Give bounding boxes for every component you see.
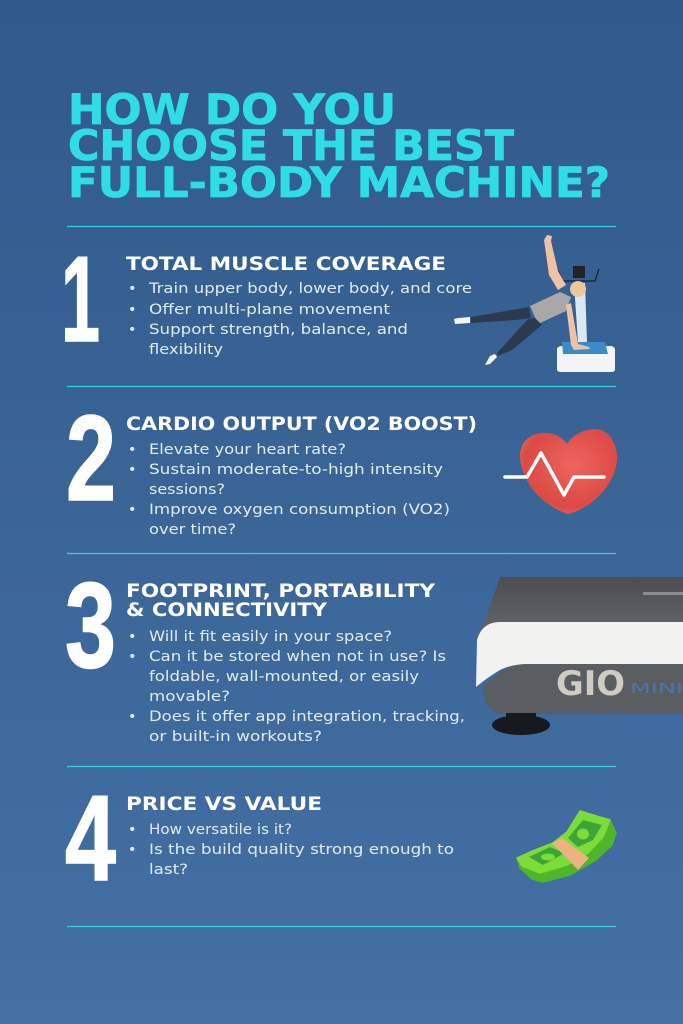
list: footprint points (128, 629, 465, 745)
title: HOW DO YOU (68, 85, 396, 134)
list: muscle coverage points: Train upper body, lower body, and core (148, 281, 472, 297)
list: footprint points: Does it offer app integration, tracking, (149, 709, 465, 725)
list: price points: last? (149, 862, 188, 878)
list: muscle coverage points: • (128, 322, 137, 338)
list: price points: • (128, 842, 137, 858)
list: muscle coverage points: flexibility (149, 342, 223, 358)
list: footprint points: or built-in workouts? (149, 729, 322, 745)
image: GIO Mini vibration plate close-up (476, 577, 683, 735)
list: price points: • (128, 822, 137, 838)
list: footprint points: Can it be stored when not in use? Is (149, 649, 446, 665)
list: cardio points: • (128, 502, 137, 518)
heading: footprint, portability and connectivity: FOOTPRINT, PORTABILITY (126, 580, 435, 602)
list: muscle coverage points: • (128, 302, 137, 318)
image: GIO Mini vibration plate close-up: MINI (630, 681, 683, 697)
icon: stack of money (517, 811, 616, 882)
list: cardio points: • (128, 462, 137, 478)
heading: total muscle coverage: TOTAL MUSCLE COVERAGE (126, 253, 446, 275)
list: cardio points: over time? (149, 522, 236, 538)
list: footprint points: • (128, 629, 137, 645)
list: price points (128, 822, 454, 878)
panel: total muscle coverage (61, 231, 615, 372)
number 2: 2 (66, 390, 116, 526)
icon: heart with pulse line (505, 429, 617, 514)
number 4: 4 (65, 770, 116, 906)
image: GIO Mini vibration plate close-up: GIO (556, 664, 625, 704)
panel: price vs value (65, 770, 616, 906)
list: muscle coverage points (128, 281, 472, 358)
heading: footprint, portability and connectivity: & CONNECTIVITY (126, 599, 327, 621)
list: cardio points: Elevate your heart rate? (149, 442, 346, 458)
number 3: 3 (65, 557, 116, 693)
title: CHOOSE THE BEST (68, 121, 514, 170)
heading: footprint, portability and connectivity (126, 580, 435, 621)
list: cardio points: Sustain moderate-to-high intensity (149, 462, 443, 478)
list: price points: Is the build quality strong enough to (149, 842, 454, 858)
heading: cardio output: CARDIO OUTPUT (VO2 BOOST) (126, 413, 477, 435)
list: cardio points (128, 442, 450, 538)
list: cardio points: • (128, 442, 137, 458)
list: price points: How versatile is it? (149, 822, 292, 838)
list: muscle coverage points: Offer multi-plane movement (149, 302, 390, 318)
title (68, 85, 610, 207)
list: footprint points: • (128, 649, 137, 665)
list: muscle coverage points: • (128, 281, 137, 297)
title: FULL-BODY MACHINE? (68, 158, 610, 207)
panel: cardio output (66, 390, 617, 538)
list: footprint points: Will it fit easily in your space? (149, 629, 392, 645)
list: muscle coverage points: Support strength, balance, and (149, 322, 408, 338)
number 1: 1 (61, 231, 100, 367)
list: cardio points: Improve oxygen consumption (VO2) (149, 502, 450, 518)
list: footprint points: foldable, wall-mounted, or easily (149, 669, 419, 685)
list: cardio points: sessions? (149, 482, 225, 498)
list: footprint points: • (128, 709, 137, 725)
heading: price vs value: PRICE VS VALUE (126, 793, 322, 815)
list: footprint points: movable? (149, 689, 230, 705)
panel: footprint, portability and connectivity (65, 557, 683, 745)
icon: woman exercising on vibration plate (454, 235, 615, 372)
